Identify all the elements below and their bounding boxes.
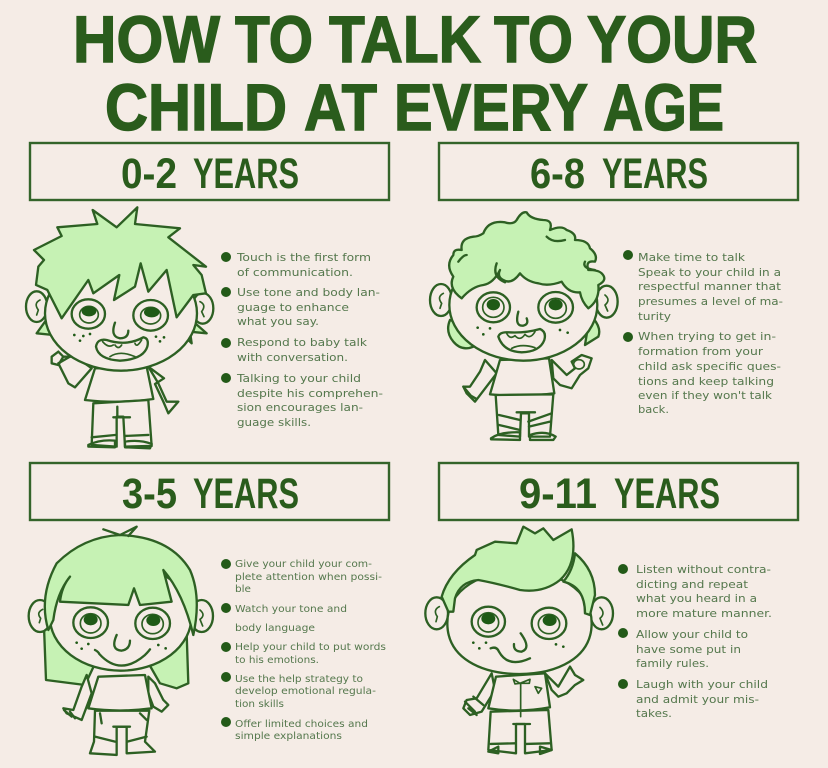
title: TO bbox=[235, 2, 313, 76]
illustration: waving boy with spiky hair bbox=[26, 207, 213, 448]
text: 6-8 years advice: formation from your bbox=[638, 345, 764, 358]
title: CHILD bbox=[105, 70, 287, 144]
text: 3-5 years advice: Give your child your com- bbox=[235, 559, 372, 570]
text: 9-11 years advice: takes. bbox=[636, 707, 672, 720]
text: 6-8 years advice: Speak to your child in a bbox=[638, 266, 781, 279]
heading: 6-8 years: 6-8 bbox=[530, 150, 585, 198]
heading: 9-11 years bbox=[439, 463, 798, 520]
panel: 6-8 years bbox=[430, 143, 798, 440]
text: 6-8 years advice: back. bbox=[638, 403, 669, 416]
text: 6-8 years advice bbox=[623, 250, 783, 416]
heading: 0-2 years: 0-2 bbox=[121, 150, 177, 198]
text: 0-2 years advice: Touch is the first form bbox=[236, 251, 371, 264]
text: 0-2 years advice: of communication. bbox=[237, 266, 353, 279]
heading: 9-11 years: 9-11 bbox=[519, 470, 597, 518]
text: 3-5 years advice: tion skills bbox=[235, 699, 284, 710]
text: 3-5 years advice: body language bbox=[235, 623, 315, 634]
heading: 3-5 years: 3-5 bbox=[122, 470, 177, 518]
title bbox=[73, 2, 757, 144]
text: 3-5 years advice: Use the help strategy to bbox=[235, 674, 363, 685]
illustration: smiling girl with long hair bbox=[29, 527, 213, 755]
illustration: boy with quiff hair bbox=[425, 527, 613, 754]
text: 9-11 years advice: Allow your child to bbox=[636, 628, 748, 641]
text: 6-8 years advice: tions and keep talking bbox=[638, 375, 774, 388]
text: 3-5 years advice: to his emotions. bbox=[235, 655, 319, 666]
heading: 0-2 years bbox=[30, 143, 389, 200]
text: 0-2 years advice: Respond to baby talk bbox=[237, 336, 368, 349]
text: 9-11 years advice bbox=[618, 563, 772, 720]
text: 0-2 years advice: Use tone and body lan- bbox=[237, 286, 380, 299]
text: 3-5 years advice: Offer limited choices and bbox=[235, 719, 368, 730]
text: 0-2 years advice: guage to enhance bbox=[237, 301, 349, 314]
panel: 0-2 years bbox=[26, 143, 389, 448]
text: 6-8 years advice: presumes a level of ma- bbox=[638, 295, 783, 308]
text: 3-5 years advice: plete attention when possi- bbox=[235, 572, 382, 583]
text: 0-2 years advice: guage skills. bbox=[237, 416, 311, 429]
text: 0-2 years advice: sion encourages lan- bbox=[237, 401, 363, 414]
text: 6-8 years advice: When trying to get in- bbox=[638, 330, 776, 343]
text: 3-5 years advice: develop emotional regula- bbox=[235, 686, 376, 697]
text: 6-8 years advice: turity bbox=[638, 310, 672, 323]
panel: 9-11 years bbox=[425, 463, 798, 754]
text: 9-11 years advice: family rules. bbox=[636, 657, 709, 670]
text: 9-11 years advice: have some put in bbox=[636, 643, 741, 656]
title: EVERY bbox=[394, 70, 588, 144]
title: AT bbox=[304, 70, 377, 144]
title: TALK bbox=[329, 2, 481, 76]
heading: 6-8 years bbox=[439, 143, 798, 200]
text: 0-2 years advice bbox=[221, 251, 383, 429]
text: 3-5 years advice: Help your child to put words bbox=[235, 642, 386, 653]
title: TO bbox=[494, 2, 573, 76]
heading: 9-11 years: YEARS bbox=[614, 470, 720, 518]
title: AGE bbox=[603, 70, 724, 144]
heading: 6-8 years: YEARS bbox=[602, 150, 708, 198]
text: 9-11 years advice: more mature manner. bbox=[636, 607, 772, 620]
title: YOUR bbox=[587, 2, 757, 76]
text: 0-2 years advice: with conversation. bbox=[237, 351, 348, 364]
text: 9-11 years advice: and admit your mis- bbox=[636, 693, 759, 706]
text: 9-11 years advice: dicting and repeat bbox=[636, 578, 749, 591]
text: 0-2 years advice: Talking to your child bbox=[236, 372, 361, 385]
heading: 3-5 years bbox=[30, 463, 389, 520]
heading: 3-5 years: YEARS bbox=[193, 470, 299, 518]
text: 3-5 years advice: ble bbox=[235, 584, 251, 595]
text: 9-11 years advice: Laugh with your child bbox=[636, 678, 768, 691]
text: 3-5 years advice bbox=[221, 559, 386, 742]
panel: 3-5 years bbox=[29, 463, 389, 755]
text: 3-5 years advice: Watch your tone and bbox=[235, 604, 347, 615]
text: 6-8 years advice: respectful manner that bbox=[638, 280, 782, 293]
text: 6-8 years advice: even if they won't talk bbox=[638, 389, 773, 402]
text: 0-2 years advice: what you say. bbox=[237, 315, 319, 328]
text: 9-11 years advice: what you heard in a bbox=[636, 592, 757, 605]
text: 6-8 years advice: child ask specific ques- bbox=[638, 360, 781, 373]
title: HOW bbox=[73, 2, 221, 76]
text: 9-11 years advice: Listen without contra- bbox=[636, 563, 771, 576]
text: 0-2 years advice: despite his comprehen- bbox=[237, 387, 383, 400]
text: 6-8 years advice: Make time to talk bbox=[638, 251, 746, 264]
text: 3-5 years advice: simple explanations bbox=[235, 731, 342, 742]
heading: 0-2 years: YEARS bbox=[193, 150, 299, 198]
illustration: curly haired boy bbox=[430, 212, 618, 440]
